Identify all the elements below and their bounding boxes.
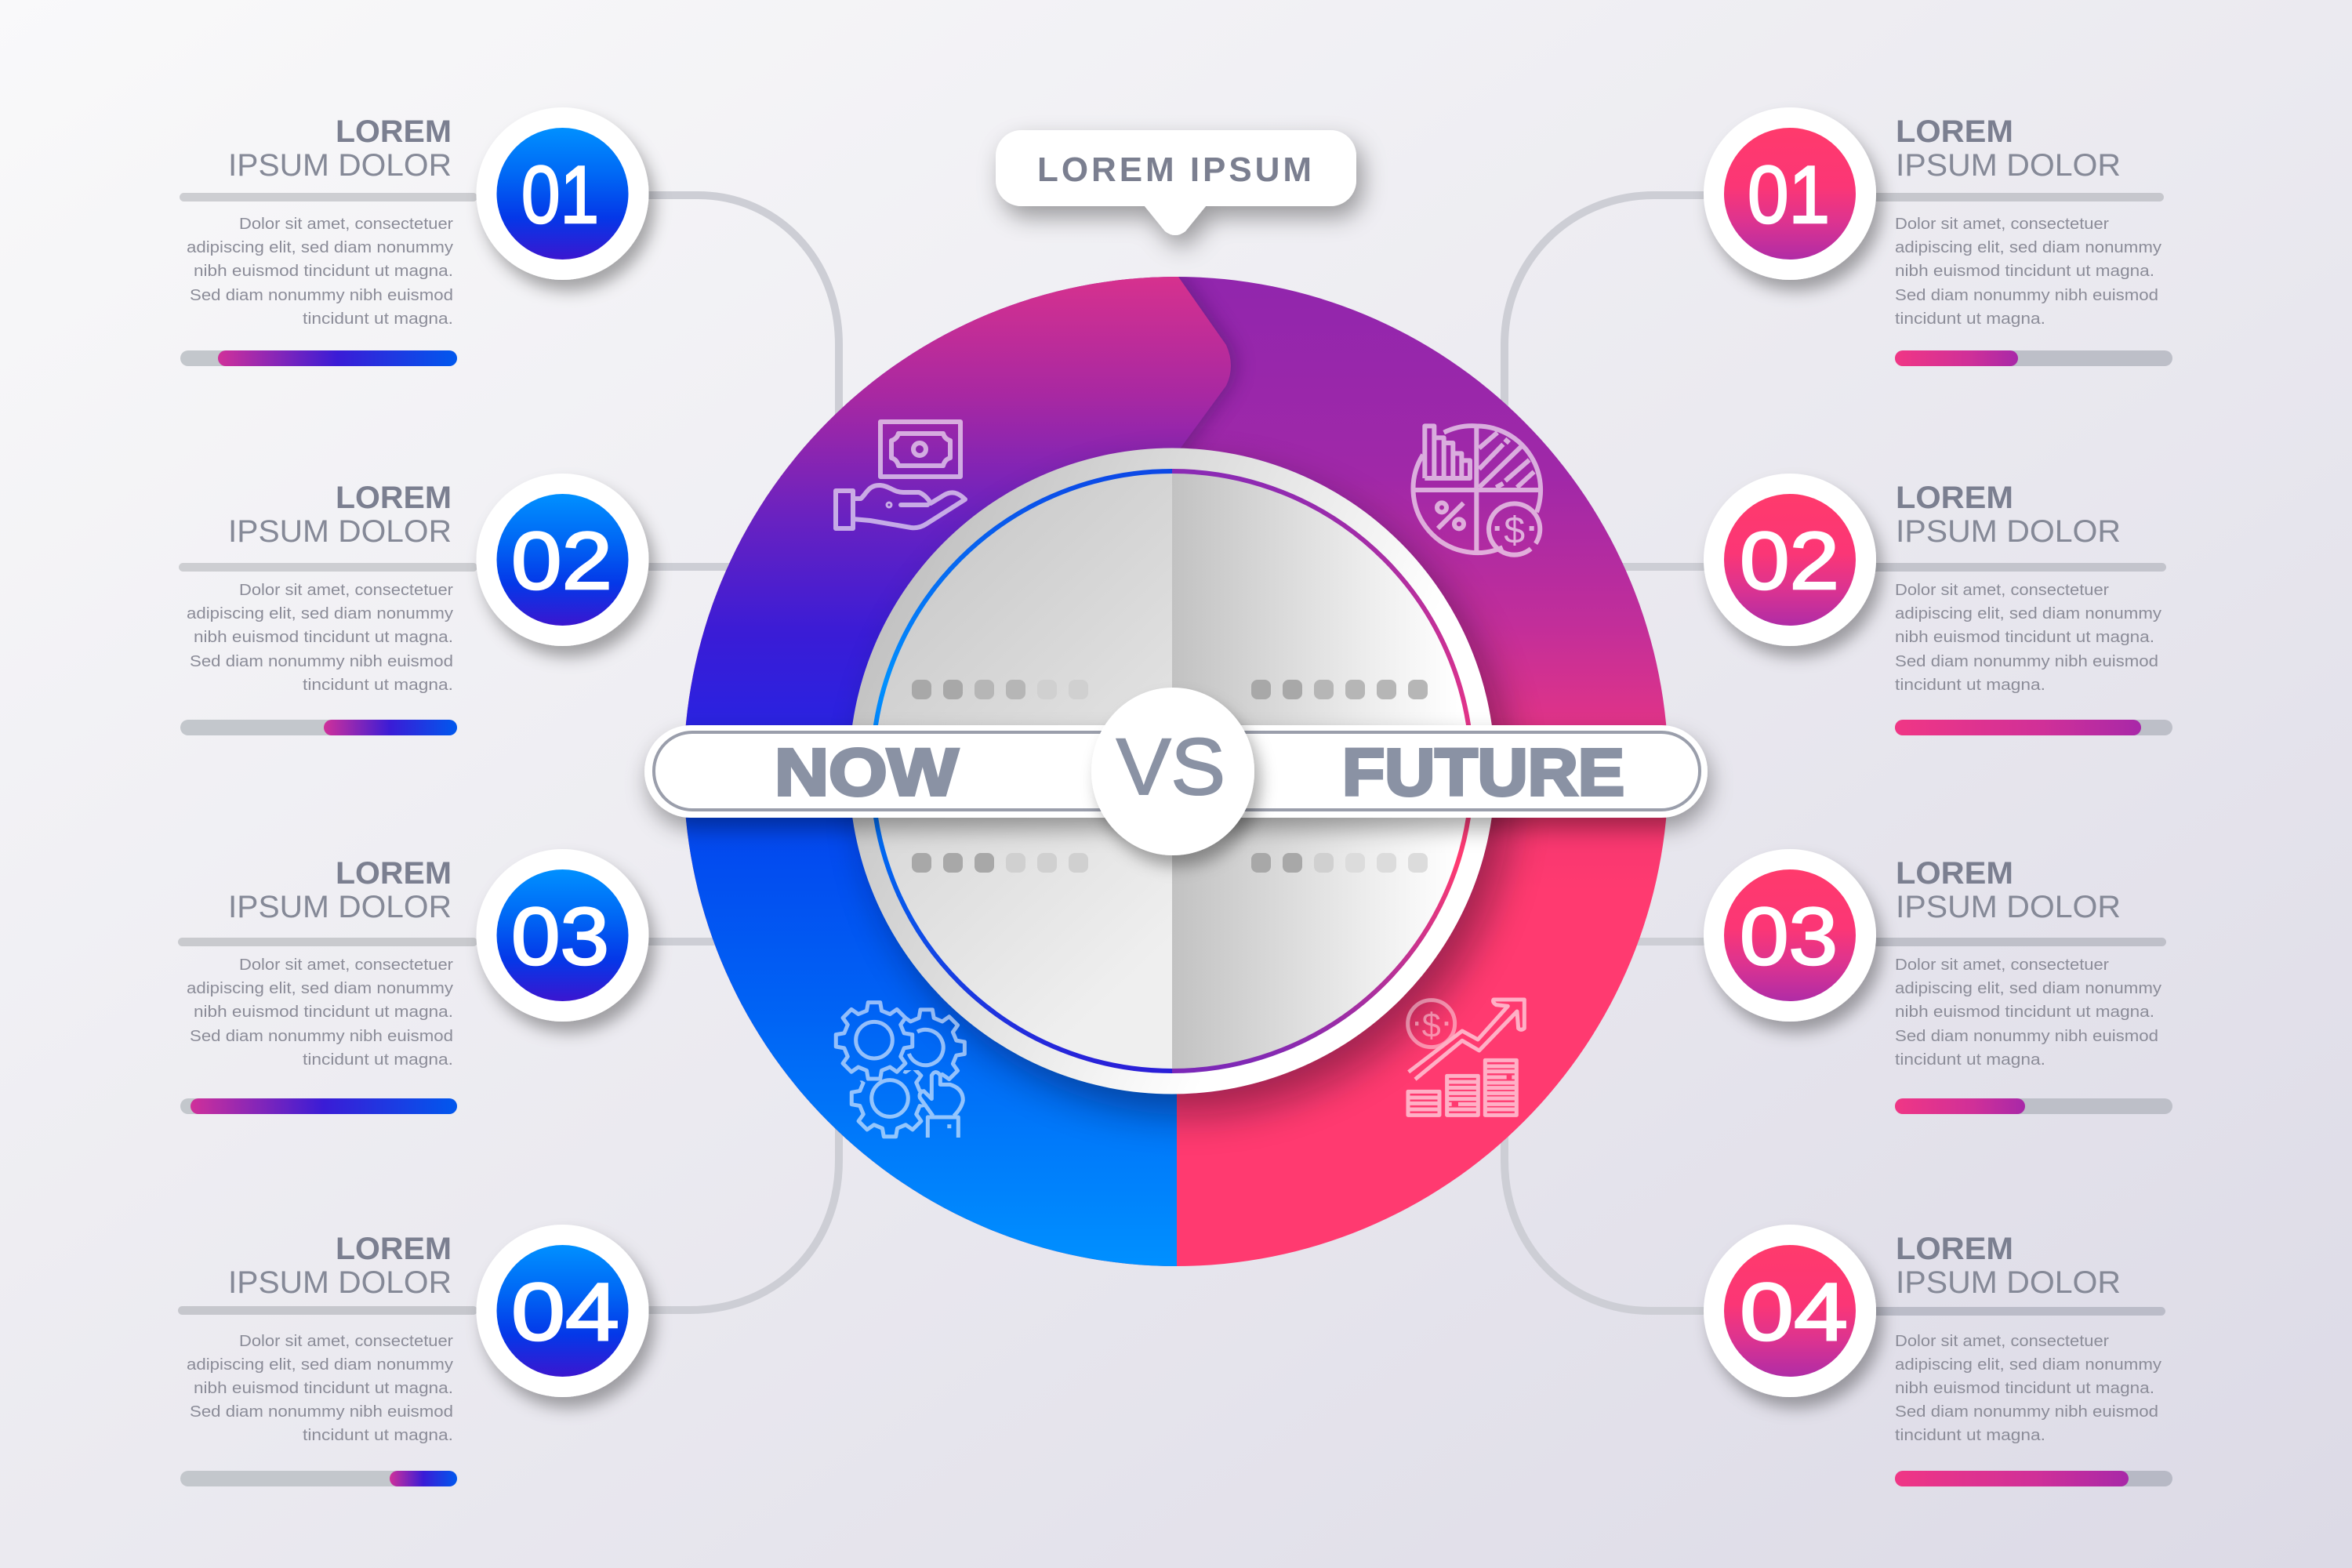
text block: nibh euismod tincidunt ut magna. (1895, 262, 2154, 280)
label: future: FUTURE (1342, 735, 1624, 809)
icon: money on hand (836, 422, 965, 528)
callout: LOREM IPSUM (1037, 151, 1312, 189)
panel: right 04 (1704, 1225, 2172, 1486)
text block: nibh euismod tincidunt ut magna. (1895, 1003, 2154, 1021)
heading: LOREM (1896, 114, 2013, 149)
number badge (477, 107, 649, 280)
connector: left 03 (649, 938, 745, 946)
number badge: 04 (1740, 1267, 1848, 1358)
heading: IPSUM DOLOR (228, 890, 452, 924)
connector: right 04 (1504, 1113, 1703, 1311)
text block: nibh euismod tincidunt ut magna. (1895, 1379, 2154, 1397)
text block: tincidunt ut magna. (303, 1426, 453, 1444)
heading (1896, 856, 2121, 924)
text block: Sed diam nonummy nibh euismod (1895, 652, 2158, 670)
panel: left 02 (179, 474, 649, 735)
number badge: 01 (521, 150, 599, 241)
rating dots: lower left (912, 853, 1088, 873)
progress bar (1895, 1098, 2172, 1114)
text block: Sed diam nonummy nibh euismod (1895, 1027, 2158, 1045)
text block: tincidunt ut magna. (1895, 310, 2045, 328)
heading (1896, 114, 2121, 183)
progress bar (180, 1471, 457, 1486)
panel: left 03 (178, 849, 649, 1114)
number badge: 02 (511, 516, 612, 607)
number badge: 03 (511, 891, 609, 982)
number badge: 02 (1740, 516, 1839, 607)
text block (187, 581, 454, 694)
heading: IPSUM DOLOR (228, 148, 452, 183)
text block (187, 215, 454, 328)
heading: LOREM (336, 114, 452, 149)
number badge: 03 (1740, 891, 1838, 982)
text block: tincidunt ut magna. (1895, 1051, 2045, 1069)
label: now: NOW (775, 735, 959, 809)
text block: Sed diam nonummy nibh euismod (190, 1027, 453, 1045)
icon: pie chart with bars: $ (1504, 510, 1525, 552)
text block: Dolor sit amet, consectetuer (1895, 215, 2109, 233)
center disc (849, 448, 1495, 1094)
text block: Sed diam nonummy nibh euismod (190, 1403, 453, 1421)
progress bar (1895, 1471, 2172, 1486)
connector: right 01 (1504, 195, 1703, 423)
text block: adipiscing elit, sed diam nonummy (1895, 1356, 2162, 1374)
panel: left 04 (178, 1225, 649, 1486)
heading: LOREM (336, 856, 452, 891)
rating dots: upper right (1251, 680, 1428, 699)
connector: right 02 (1615, 563, 1703, 571)
text block (1895, 1332, 2162, 1444)
text block: Dolor sit amet, consectetuer (239, 1332, 453, 1350)
heading: LOREM (336, 1232, 452, 1266)
number badge (477, 849, 649, 1022)
number badge (1704, 849, 1876, 1022)
progress bar (180, 350, 457, 366)
number badge (1704, 474, 1876, 646)
text block: adipiscing elit, sed diam nonummy (187, 238, 454, 256)
progress bar (1895, 720, 2172, 735)
text block: tincidunt ut magna. (303, 676, 453, 694)
text block: Sed diam nonummy nibh euismod (1895, 1403, 2158, 1421)
text block: adipiscing elit, sed diam nonummy (187, 604, 454, 622)
connector: left 02 (649, 563, 745, 571)
text block: adipiscing elit, sed diam nonummy (1895, 604, 2162, 622)
text block: adipiscing elit, sed diam nonummy (1895, 238, 2162, 256)
panel: left 01 (180, 107, 649, 366)
vs badge (1091, 688, 1254, 855)
text block: adipiscing elit, sed diam nonummy (187, 979, 454, 997)
text block: Dolor sit amet, consectetuer (239, 581, 453, 599)
progress bar (1895, 350, 2172, 366)
heading: IPSUM DOLOR (1896, 514, 2121, 549)
panel: right 03 (1704, 849, 2172, 1114)
text block: tincidunt ut magna. (303, 1051, 453, 1069)
icon: gears and hand (836, 1003, 964, 1138)
text block: tincidunt ut magna. (303, 310, 453, 328)
text block: nibh euismod tincidunt ut magna. (1895, 628, 2154, 646)
heading: IPSUM DOLOR (1896, 890, 2121, 924)
heading: IPSUM DOLOR (228, 1265, 452, 1300)
heading (228, 481, 452, 549)
text block: Dolor sit amet, consectetuer (1895, 1332, 2109, 1350)
icon: growth chart (1408, 1000, 1524, 1115)
vs badge: VS (1116, 722, 1225, 811)
panel: right 02 (1704, 474, 2172, 735)
connector: left 04 (649, 1113, 839, 1310)
callout (996, 130, 1356, 235)
text block: nibh euismod tincidunt ut magna. (194, 628, 453, 646)
panel: right 01 (1704, 107, 2172, 366)
connector: left 01 (649, 195, 839, 423)
heading: LOREM (1896, 1232, 2013, 1266)
banner: now vs future (644, 725, 1708, 818)
text block: Dolor sit amet, consectetuer (1895, 581, 2109, 599)
text block: Sed diam nonummy nibh euismod (190, 652, 453, 670)
text block (1895, 956, 2162, 1069)
heading: LOREM (336, 481, 452, 515)
main gradient ring (674, 267, 1686, 1278)
heading (228, 1232, 452, 1300)
heading: IPSUM DOLOR (1896, 1265, 2121, 1300)
text block (187, 956, 454, 1069)
text block: nibh euismod tincidunt ut magna. (194, 1003, 453, 1021)
text block: Sed diam nonummy nibh euismod (190, 286, 453, 304)
text block: nibh euismod tincidunt ut magna. (194, 262, 453, 280)
text block (1895, 581, 2162, 694)
text block: Sed diam nonummy nibh euismod (1895, 286, 2158, 304)
number badge (477, 1225, 649, 1397)
heading (228, 114, 452, 183)
number badge: 01 (1748, 150, 1830, 241)
rating dots: upper left (912, 680, 1088, 699)
text block: adipiscing elit, sed diam nonummy (1895, 979, 2162, 997)
icon: pie chart with bars (1413, 426, 1541, 555)
text block: tincidunt ut magna. (1895, 1426, 2045, 1444)
heading (1896, 481, 2121, 549)
number badge: 04 (511, 1267, 619, 1358)
text block: Dolor sit amet, consectetuer (239, 956, 453, 974)
heading (1896, 1232, 2121, 1300)
heading: IPSUM DOLOR (1896, 148, 2121, 183)
heading: IPSUM DOLOR (228, 514, 452, 549)
text block: Dolor sit amet, consectetuer (1895, 956, 2109, 974)
number badge (1704, 107, 1876, 280)
rating dots: lower right (1251, 853, 1428, 873)
connector: right 03 (1631, 938, 1703, 946)
text block: nibh euismod tincidunt ut magna. (194, 1379, 453, 1397)
text block: Dolor sit amet, consectetuer (239, 215, 453, 233)
progress bar (180, 1098, 457, 1114)
number badge (477, 474, 649, 646)
text block (187, 1332, 454, 1444)
progress bar (180, 720, 457, 735)
heading: LOREM (1896, 856, 2013, 891)
icon: growth chart: $ (1422, 1007, 1441, 1045)
text block: adipiscing elit, sed diam nonummy (187, 1356, 454, 1374)
text block (1895, 215, 2162, 328)
number badge (1704, 1225, 1876, 1397)
heading (228, 856, 452, 924)
heading: LOREM (1896, 481, 2013, 515)
text block: tincidunt ut magna. (1895, 676, 2045, 694)
